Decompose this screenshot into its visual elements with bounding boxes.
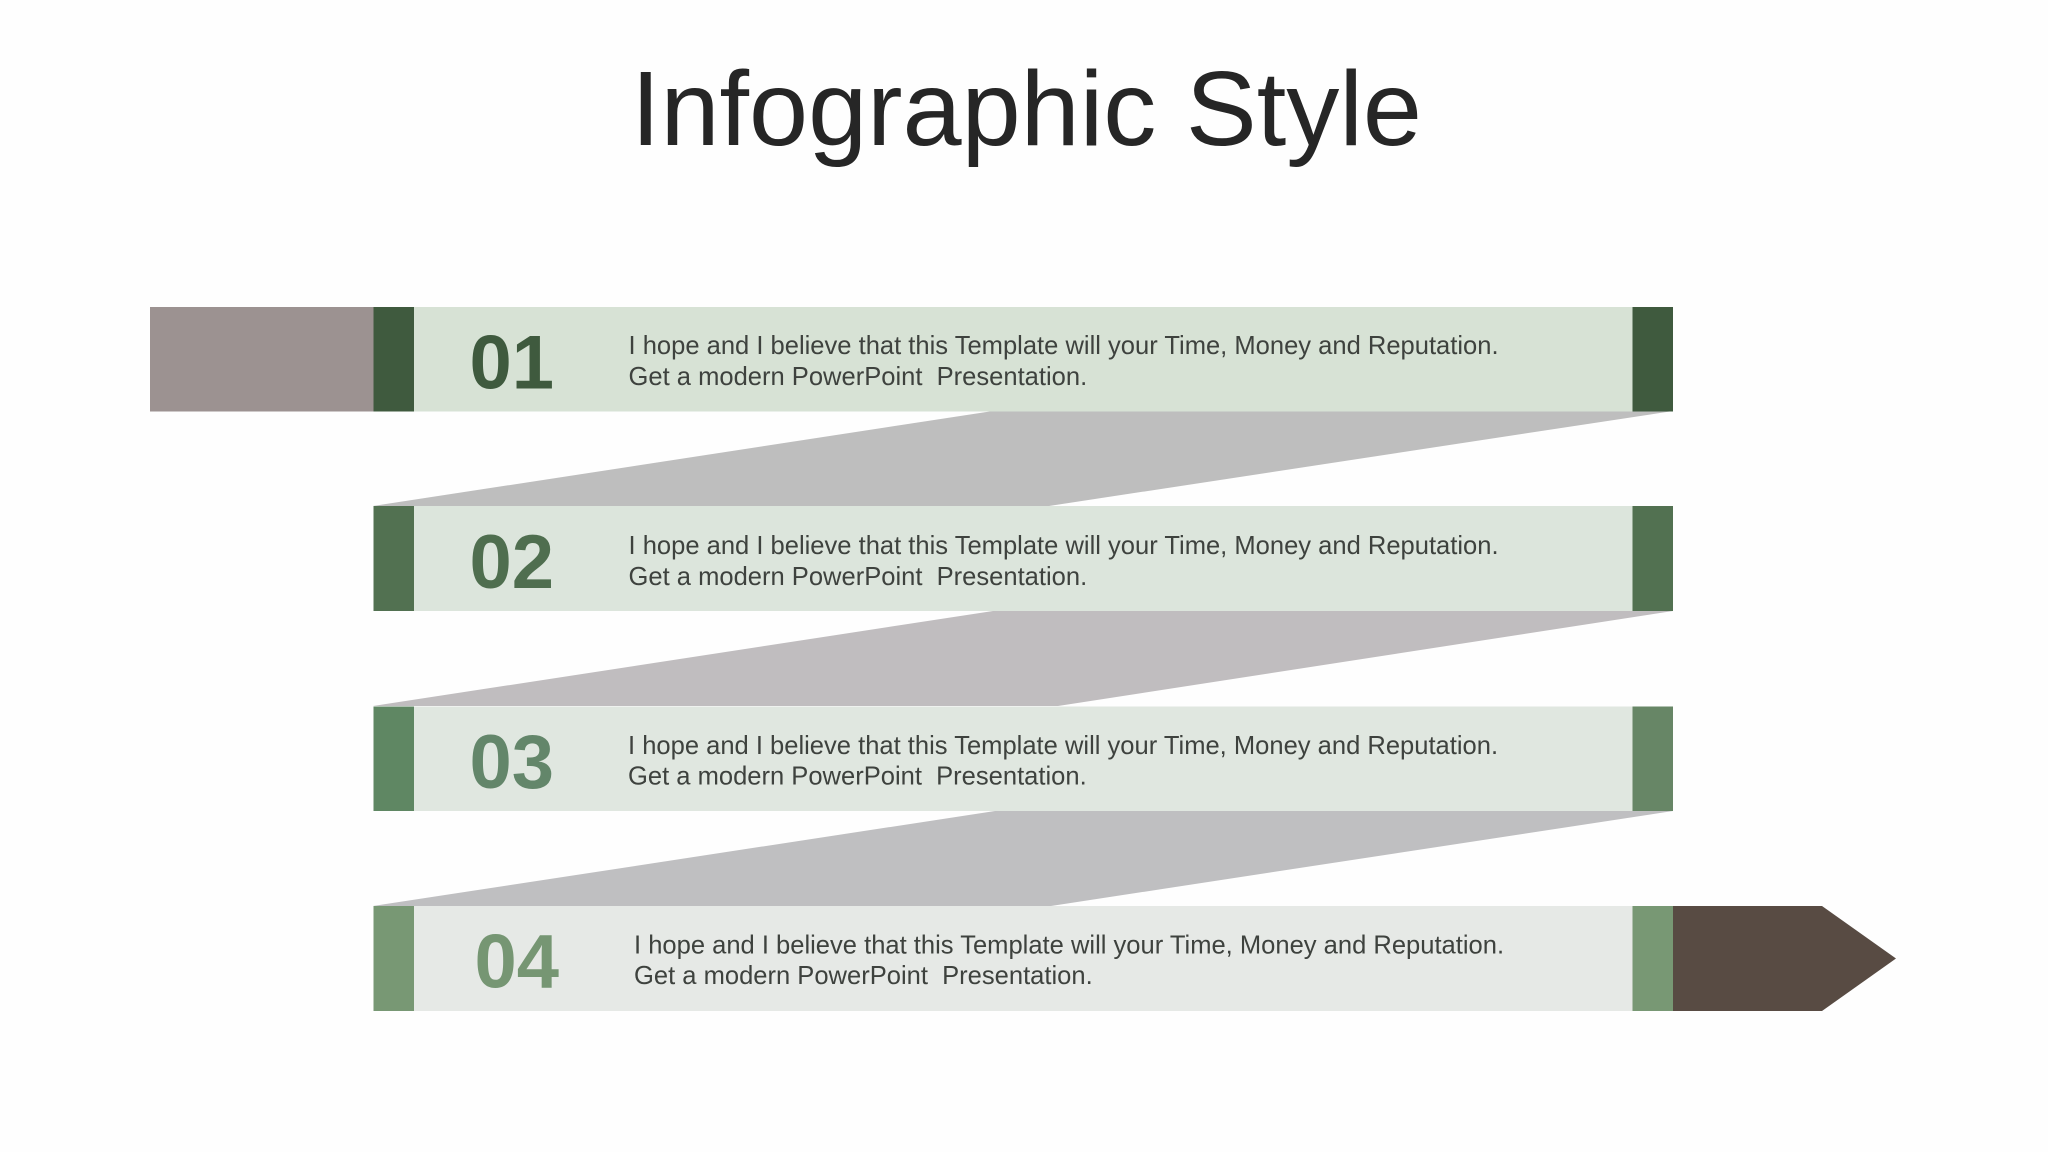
title: Infographic Style [631, 49, 1422, 168]
arrow: end pointer [1673, 906, 1896, 1011]
connector band 3 to 4 [373, 811, 1673, 906]
number 02: 02 [470, 520, 554, 605]
panel: step 04 [374, 906, 1673, 1011]
text: step 03: Get a modern PowerPoint Presentation. [628, 762, 1087, 790]
text: step 01: Get a modern PowerPoint Presentation. [628, 363, 1087, 391]
text: step 02: Get a modern PowerPoint Presentation. [628, 563, 1087, 591]
text: step 04: I hope and I believe that this Template will your Time, Money and Reputation. [634, 932, 1504, 960]
text: step 03: I hope and I believe that this Template will your Time, Money and Reputation. [628, 732, 1498, 760]
number 01: 01 [470, 320, 554, 406]
panel: step 02 [374, 506, 1673, 611]
connector band 2 to 3 [373, 611, 1673, 706]
number 04: 04 [474, 920, 559, 1004]
text: step 04: Get a modern PowerPoint Presentation. [634, 962, 1093, 990]
number 03: 03 [470, 720, 554, 805]
start block [150, 307, 374, 412]
connector band 1 to 2 [373, 411, 1673, 506]
panel: step 03 [374, 706, 1673, 811]
text: step 01: I hope and I believe that this Template will your Time, Money and Reputation. [628, 332, 1499, 360]
panel: step 01 [374, 307, 1673, 412]
text: step 02: I hope and I believe that this Template will your Time, Money and Reputation. [628, 532, 1499, 560]
